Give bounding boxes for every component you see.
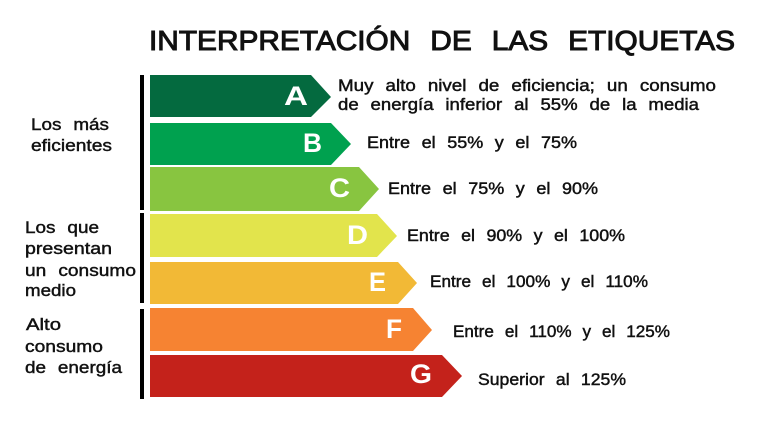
bar G: G [410, 359, 432, 389]
bar F: F [386, 314, 402, 344]
description F: Entre el 110% y el 125% [453, 323, 670, 341]
bar C [150, 167, 379, 211]
group bracket: los más eficientes [140, 75, 144, 210]
group label: alto consumo [25, 315, 123, 377]
description G: Superior al 125% [478, 371, 626, 389]
bar A [150, 75, 331, 117]
bar D [150, 214, 397, 257]
group bracket: consumo medio [140, 213, 144, 303]
description A: de energía inferior al 55% de la media [338, 96, 700, 114]
bar B: B [303, 128, 322, 158]
description A: Muy alto nivel de eficiencia; un consumo [338, 77, 716, 95]
description B: Entre el 55% y el 75% [367, 134, 577, 152]
group label: consumo medio: medio [25, 281, 76, 300]
bar E: E [369, 267, 386, 297]
group label: alto consumo: Alto [26, 315, 61, 334]
bar D: D [347, 220, 368, 250]
title: INTERPRETACIÓN DE LAS ETIQUETAS [149, 25, 735, 56]
bar B [150, 123, 351, 165]
group label: consumo medio [25, 218, 136, 300]
description A [338, 77, 716, 114]
group label: alto consumo: consumo [25, 337, 103, 356]
group bracket: alto consumo [140, 309, 144, 399]
bar F [150, 308, 432, 351]
description E: Entre el 100% y el 110% [430, 273, 648, 291]
bar C: C [329, 173, 350, 203]
description D: Entre el 90% y el 100% [407, 227, 625, 245]
description C: Entre el 75% y el 90% [388, 180, 598, 198]
group label: consumo medio: presentan [25, 239, 112, 258]
bar A: A [284, 81, 308, 111]
bar G [150, 355, 462, 397]
group label: consumo medio: Los que [25, 218, 99, 237]
bar E [150, 262, 417, 304]
group label: consumo medio: un consumo [25, 261, 136, 280]
group label: alto consumo: de energía [25, 358, 123, 377]
group label: los más eficientes [31, 115, 112, 155]
group label: los más eficientes: eficientes [31, 136, 112, 155]
group label: los más eficientes: Los más [31, 115, 109, 134]
